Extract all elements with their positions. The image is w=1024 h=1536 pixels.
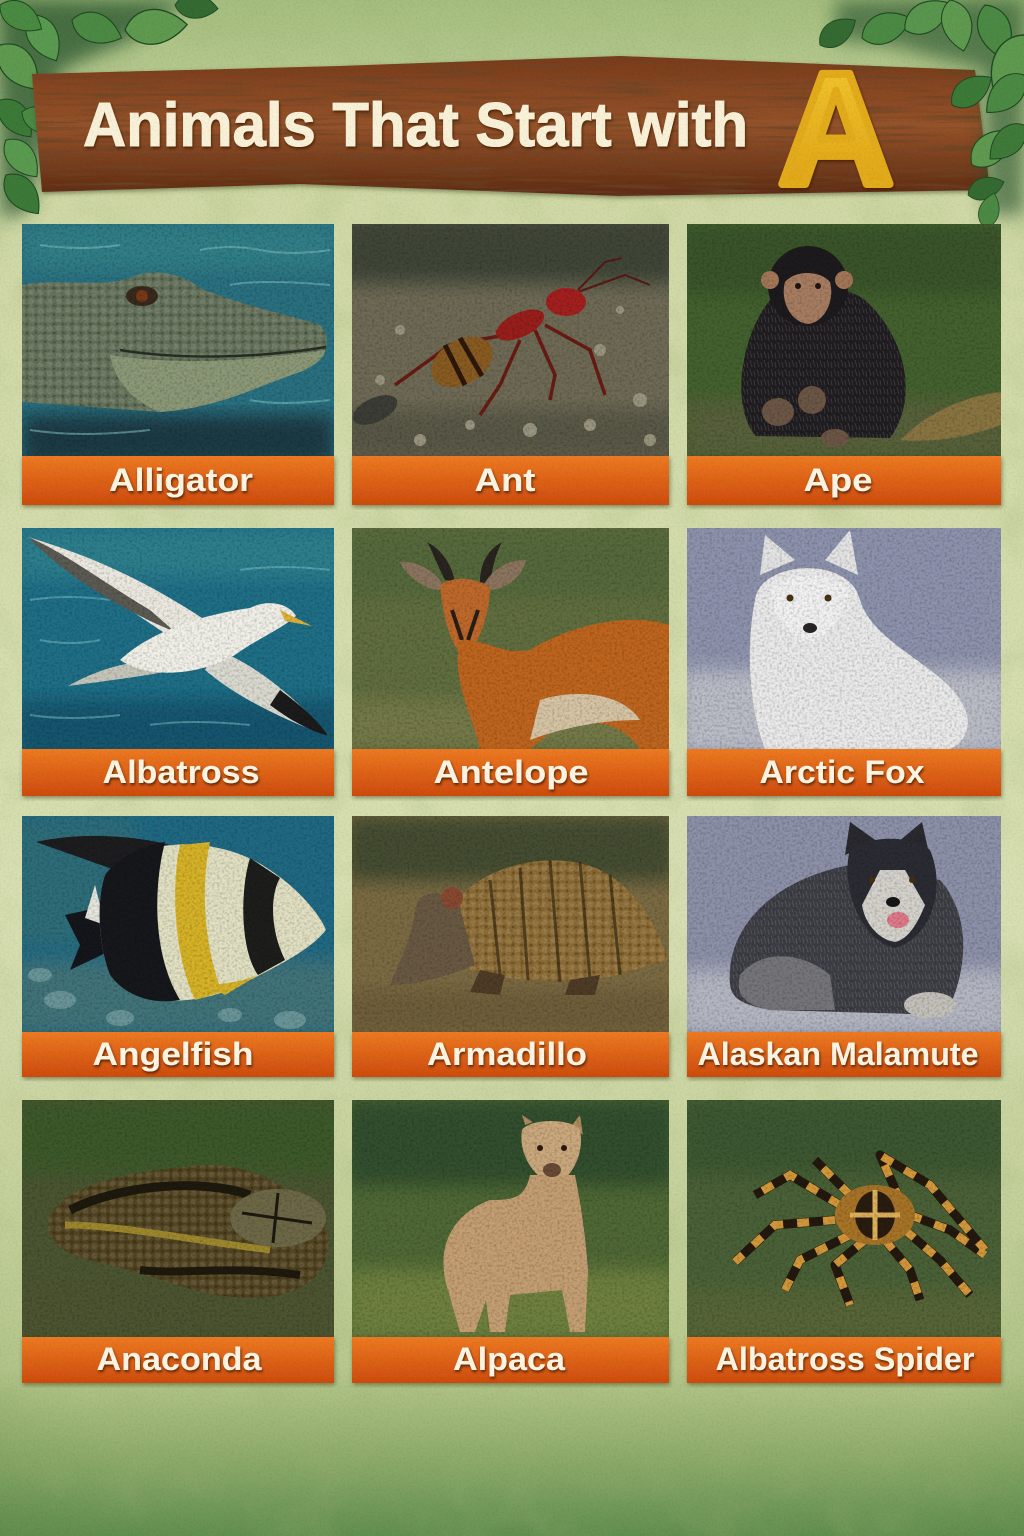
label bar	[352, 749, 669, 796]
wooden title banner	[32, 55, 991, 201]
panel: Ape	[680, 224, 1010, 505]
label: Alligator	[109, 462, 253, 498]
label: Albatross Spider	[716, 1341, 974, 1377]
photo: spider	[680, 1100, 1010, 1340]
label: Ape	[804, 462, 872, 498]
label bar	[687, 1032, 1001, 1077]
photo: armadillo	[345, 816, 675, 1035]
panel: Alligator	[22, 224, 334, 505]
label bar	[22, 1032, 334, 1077]
panel: Angelfish	[15, 816, 345, 1077]
label bar	[22, 456, 334, 505]
panel: Ant	[340, 215, 680, 505]
photo: alligator in water	[22, 224, 334, 465]
label bar	[687, 456, 1001, 505]
label bar	[687, 1337, 1001, 1383]
photo: chimpanzee	[680, 224, 1010, 460]
title text: Animals That Start with	[83, 91, 748, 160]
label: Arctic Fox	[760, 754, 925, 790]
corner foliage: top right	[813, 0, 1024, 230]
label bar	[22, 749, 334, 796]
label: Armadillo	[427, 1036, 587, 1072]
label bar	[687, 749, 1001, 796]
label bar	[22, 1337, 334, 1383]
label: Antelope	[434, 754, 588, 790]
photo: arctic fox	[680, 528, 1010, 755]
label bar	[352, 456, 669, 505]
label bar	[352, 1032, 669, 1077]
panel: Alpaca	[345, 1100, 675, 1383]
corner foliage: top left	[0, 0, 219, 222]
photo: alpaca	[345, 1100, 675, 1340]
big letter A: A	[778, 39, 894, 218]
label: Alpaca	[453, 1341, 565, 1377]
photo: albatross over sea	[15, 528, 345, 760]
panel: Antelope	[345, 528, 675, 796]
panel: Albatross	[15, 528, 345, 796]
photo: malamute	[680, 816, 1010, 1035]
panel: Albatross Spider	[680, 1100, 1010, 1383]
panel: Anaconda	[15, 1100, 345, 1383]
label: Anaconda	[96, 1341, 262, 1377]
label bar	[352, 1337, 669, 1383]
photo: red ant on gravel	[352, 224, 669, 456]
label: Ant	[474, 462, 536, 498]
label: Albatross	[102, 754, 260, 790]
panel: Alaskan Malamute	[680, 816, 1010, 1077]
photo: anaconda	[15, 1100, 345, 1340]
label: Alaskan Malamute	[698, 1036, 978, 1072]
panel: Armadillo	[345, 816, 675, 1077]
photo: antelope	[345, 528, 675, 750]
panel: Arctic Fox	[680, 528, 1010, 796]
label: Angelfish	[92, 1036, 254, 1072]
photo: angelfish	[15, 816, 345, 1035]
